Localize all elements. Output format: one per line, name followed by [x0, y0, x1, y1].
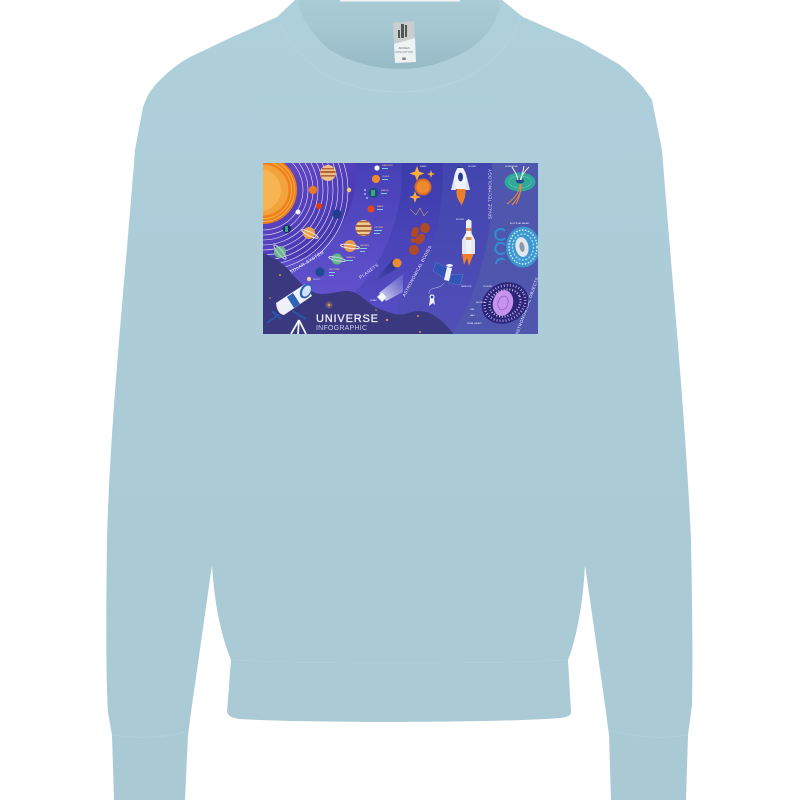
planet: mars: [367, 205, 375, 213]
planet labels: VENUS: [382, 176, 390, 178]
planet: venus: [372, 175, 380, 183]
label: rocket: ROCKET: [468, 166, 477, 168]
planet: jupiter: [320, 165, 336, 181]
neck opening: [298, 0, 500, 69]
galaxy labels: [467, 286, 492, 325]
galaxy labels: DISK: [470, 309, 475, 311]
comet white: [377, 274, 403, 302]
galaxy labels: NUCLEUS: [476, 302, 486, 304]
subtitle: infographic: INFOGRAPHIC: [316, 325, 367, 332]
astronomical objects: [467, 165, 540, 331]
planet labels: NEPTUNE: [329, 269, 340, 271]
icon: space shuttle rocket: [451, 165, 470, 206]
icon: purple galaxy: [475, 275, 535, 331]
band: astronomical bodies: [355, 163, 443, 314]
planet: saturn: [301, 227, 319, 240]
planet: yellow: [347, 188, 351, 192]
planet labels: URANUS: [346, 256, 356, 259]
neck label: 100% COTTON: [395, 51, 413, 54]
planet labels: PLUTO: [313, 279, 321, 281]
solar system planets: [273, 165, 351, 260]
planet labels: JUPITER: [374, 227, 384, 229]
label: launch rocket: ROCKET: [456, 219, 465, 221]
icon: satellite: [433, 262, 463, 285]
sweatshirt silhouette: [106, 0, 692, 800]
planet labels: [313, 165, 394, 281]
section title: planets: PLANETS: [358, 262, 380, 280]
planet: neptune: [332, 209, 342, 219]
icon: supernova galaxy: [504, 166, 536, 205]
astronomical bodies: [370, 165, 435, 302]
planet: red: [316, 203, 322, 209]
icon: star cluster: [409, 166, 435, 203]
cuff seam left: [112, 731, 189, 737]
icon: sun: [263, 163, 297, 224]
label: comet: COMET: [370, 300, 378, 302]
solar orbits: [263, 163, 348, 271]
title: universe: UNIVERSE: [316, 313, 378, 325]
label: supernova: SUPERNOVA: [505, 165, 518, 168]
planet: jupiter large: [356, 220, 372, 236]
planet: saturn large: [340, 240, 360, 252]
section title: astronomical objects: ASTRONOMICAL OBJECTS: [514, 276, 540, 336]
planet labels: MARS: [377, 205, 384, 208]
neck label: M: [402, 56, 406, 61]
band: planets: [280, 163, 402, 294]
progress arcs: [495, 229, 505, 264]
hem seam: [232, 660, 567, 663]
band: space technology: [398, 163, 492, 333]
section title: astronomical bodies: ASTRONOMICAL BODIES: [401, 245, 433, 297]
planet: mercury: [374, 165, 380, 171]
planet labels: MERCURY: [382, 165, 394, 167]
panel background: astronomical objects band: [453, 163, 538, 334]
planet detail lines: [329, 168, 388, 276]
comet orange: [373, 258, 402, 283]
neck label: [393, 21, 416, 63]
planet: uranus: [328, 254, 346, 264]
collar seam: [280, 18, 521, 92]
planet: green ringed: [273, 244, 287, 260]
infographic print panel: [263, 163, 538, 334]
galaxy labels: HALO: [470, 314, 476, 317]
planet labels: SATURN: [360, 244, 369, 247]
icon: spiral galaxy: [506, 226, 540, 268]
foreground dark hill: [263, 253, 455, 336]
hill stars: [269, 274, 421, 333]
icon: star orange: [414, 178, 432, 196]
icon: astronaut: [429, 283, 444, 306]
band: solar system: [263, 163, 356, 262]
planet labels: EARTH: [381, 189, 389, 192]
label: satellite: SATELLITE: [461, 285, 472, 288]
label: star: STARS: [420, 165, 427, 168]
planet: neptune dark: [315, 267, 325, 277]
asteroids: [409, 223, 430, 255]
planet: earth: [364, 188, 378, 199]
planet: pluto: [307, 277, 311, 281]
space technology: [429, 165, 477, 306]
constellation: [410, 208, 428, 216]
galaxy labels: SPIRAL GALAXY: [467, 322, 482, 325]
section title: space technology: SPACE TECHNOLOGY: [488, 169, 492, 219]
neck label: JERZEES: [398, 47, 410, 50]
planet: earth dark: [283, 225, 291, 233]
sweatshirt: [106, 0, 692, 800]
planets column: [307, 165, 380, 281]
icon: telescope: [267, 281, 315, 334]
planet: white: [296, 210, 300, 214]
label: elliptical galaxy: ELLIPTICAL GALAXY: [510, 222, 530, 225]
section title: solar system: SOLAR SYSTEM: [289, 249, 325, 275]
galaxy labels: CLUSTER: [483, 286, 492, 288]
collar top edge: [340, 0, 460, 2]
icon: launch rocket: [462, 219, 475, 266]
cuff seam right: [612, 731, 688, 737]
planet: mars orange: [309, 186, 317, 194]
